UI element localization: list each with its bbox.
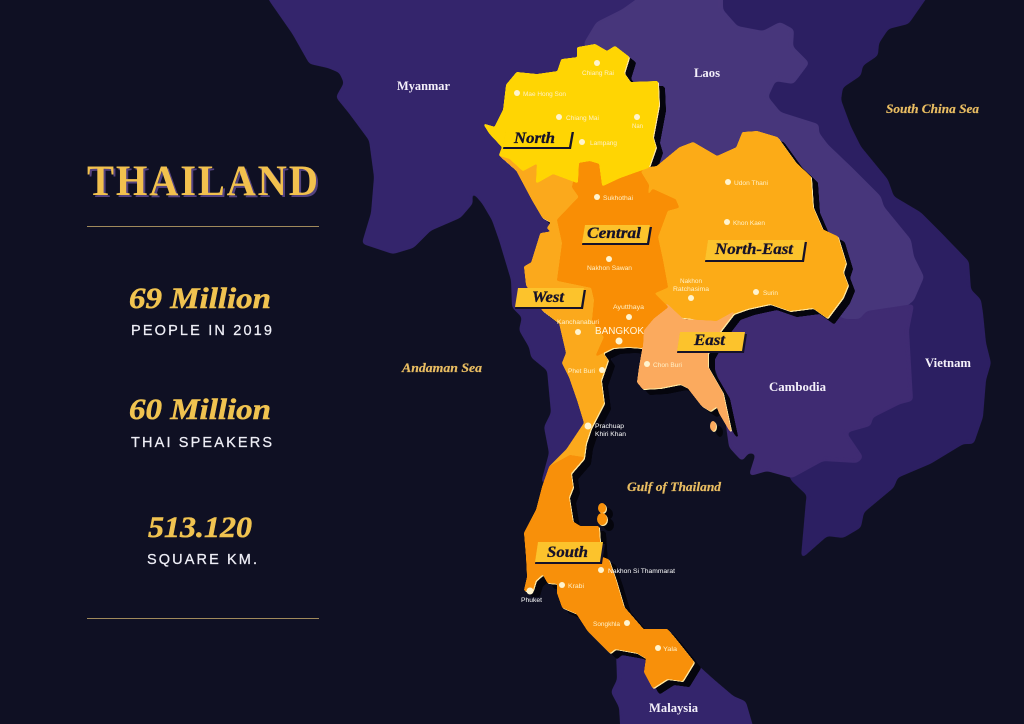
city: Kanchanaburi: [557, 319, 599, 335]
tag: South: South: [547, 544, 588, 561]
tag: North-East: North-East: [714, 241, 794, 258]
city: Chiang Mai: Chiang Mai: [566, 115, 599, 122]
region: East island: [710, 421, 716, 431]
region: West: [500, 155, 620, 467]
city: Lampang: Lampang: [590, 140, 617, 147]
bottom divider: [87, 618, 319, 619]
city: Phuket: [521, 588, 542, 604]
country and sea names: [397, 65, 979, 715]
city: Prachuap Khiri Khan: Khiri Khan: [595, 431, 626, 438]
label: South China Sea: South China Sea: [886, 102, 979, 116]
city: Phet Buri: [568, 367, 605, 375]
city: Songkhla: [593, 620, 630, 628]
tag: North-East: [705, 240, 807, 262]
tag: Central: Central: [587, 225, 642, 242]
city: Chiang Rai: Chiang Rai: [582, 70, 614, 77]
tag: North: North: [513, 130, 555, 147]
city: Chiang Rai: [582, 60, 614, 77]
city: Khon Kaen: [724, 219, 765, 227]
stat: area: 513.120: [148, 511, 252, 544]
city: Songkhla: Songkhla: [593, 621, 620, 628]
label: Vietnam: Vietnam: [925, 355, 971, 370]
stat: speakers: [129, 393, 272, 451]
city: Khon Kaen: Khon Kaen: [733, 220, 765, 227]
stat: speakers: 60 Million: [129, 393, 271, 426]
city: Udon Thani: Udon Thani: [734, 180, 768, 187]
tag: West: [515, 288, 586, 309]
city: Phet Buri: Phet Buri: [568, 368, 595, 375]
country shape: Myanmar: [262, 0, 730, 483]
city: Krabi: Krabi: [568, 583, 584, 590]
city: Sukhothai: [594, 194, 633, 202]
top divider: [87, 226, 319, 227]
region: North-East: [635, 132, 847, 327]
city: Ayutthaya: [613, 304, 644, 320]
city: Surin: [753, 289, 778, 297]
city: Prachuap Khiri Khan: Prachuap: [595, 423, 624, 430]
region: East: [638, 305, 733, 430]
label: Malaysia: Malaysia: [649, 700, 698, 715]
stat: area: [147, 511, 257, 568]
title: THAILAND: [87, 157, 318, 205]
tag: Central: [582, 225, 652, 245]
city: Sukhothai: Sukhothai: [603, 195, 633, 202]
title: THAILAND: [89, 159, 320, 207]
sidebar: title and statistics: [87, 157, 320, 619]
city: Udon Thani: [725, 179, 768, 187]
map: neighbouring countries: [262, 0, 990, 724]
stat: population: [129, 282, 272, 339]
city: Nakhon Ratchasima: Nakhon: [680, 278, 702, 285]
city: Prachuap Khiri Khan: [584, 422, 626, 438]
city: Chon Buri: Chon Buri: [653, 362, 682, 369]
stat: speakers: THAI SPEAKERS: [131, 435, 272, 451]
city: Bangkok: [595, 325, 644, 344]
stat: area: SQUARE KM.: [147, 552, 257, 568]
city: Nakhon Sawan: Nakhon Sawan: [587, 265, 632, 272]
city: Ayutthaya: Ayutthaya: [613, 304, 644, 311]
city: Mae Hong Son: Mae Hong Son: [523, 91, 566, 98]
country shape: Laos: [585, 0, 923, 332]
country shape: Vietnam: [715, 0, 990, 557]
country shape: Malaysia: [612, 640, 756, 724]
tag: East: [677, 332, 747, 353]
city: Yala: Yala: [663, 646, 677, 653]
city: Yala: [655, 645, 677, 653]
region: North: [485, 45, 658, 185]
city: Chiang Mai: [556, 114, 599, 122]
city: Surin: Surin: [763, 290, 778, 297]
country shape: Cambodia: [713, 300, 913, 477]
label: Laos: Laos: [694, 65, 720, 80]
region: Central: [558, 160, 678, 355]
label: Cambodia: Cambodia: [769, 379, 826, 394]
label: Andaman Sea: Andaman Sea: [401, 361, 482, 375]
stat: population: 69 Million: [129, 282, 271, 315]
city: Nakhon Sawan: [587, 256, 632, 272]
city: Nakhon Ratchasima: Ratchasima: [673, 286, 709, 293]
label: Myanmar: Myanmar: [397, 78, 450, 93]
label: Gulf of Thailand: Gulf of Thailand: [627, 480, 722, 494]
city markers and names: [514, 60, 778, 653]
city: Kanchanaburi: Kanchanaburi: [557, 319, 599, 326]
region: South: [525, 456, 693, 687]
region: South islands: [597, 503, 607, 525]
stat: population: PEOPLE IN 2019: [131, 323, 272, 339]
city: Nakhon Ratchasima: [673, 278, 709, 301]
city: Chon Buri: [644, 361, 682, 369]
region name tags: [503, 130, 807, 564]
city: Nakhon Si Thammarat: Nakhon Si Thammarat: [608, 568, 675, 575]
city: Bangkok: BANGKOK: [595, 325, 644, 337]
city: Krabi: [559, 582, 584, 590]
city: Nan: [632, 114, 643, 130]
city: Lampang: [579, 139, 617, 147]
tag: South: [535, 542, 605, 564]
tag: West: West: [532, 289, 565, 306]
city: Phuket: Phuket: [521, 597, 542, 604]
tag: East: East: [693, 332, 726, 349]
tag: North: [503, 130, 574, 149]
map: Thailand regions: [485, 45, 847, 687]
city: Nan: Nan: [632, 123, 643, 130]
